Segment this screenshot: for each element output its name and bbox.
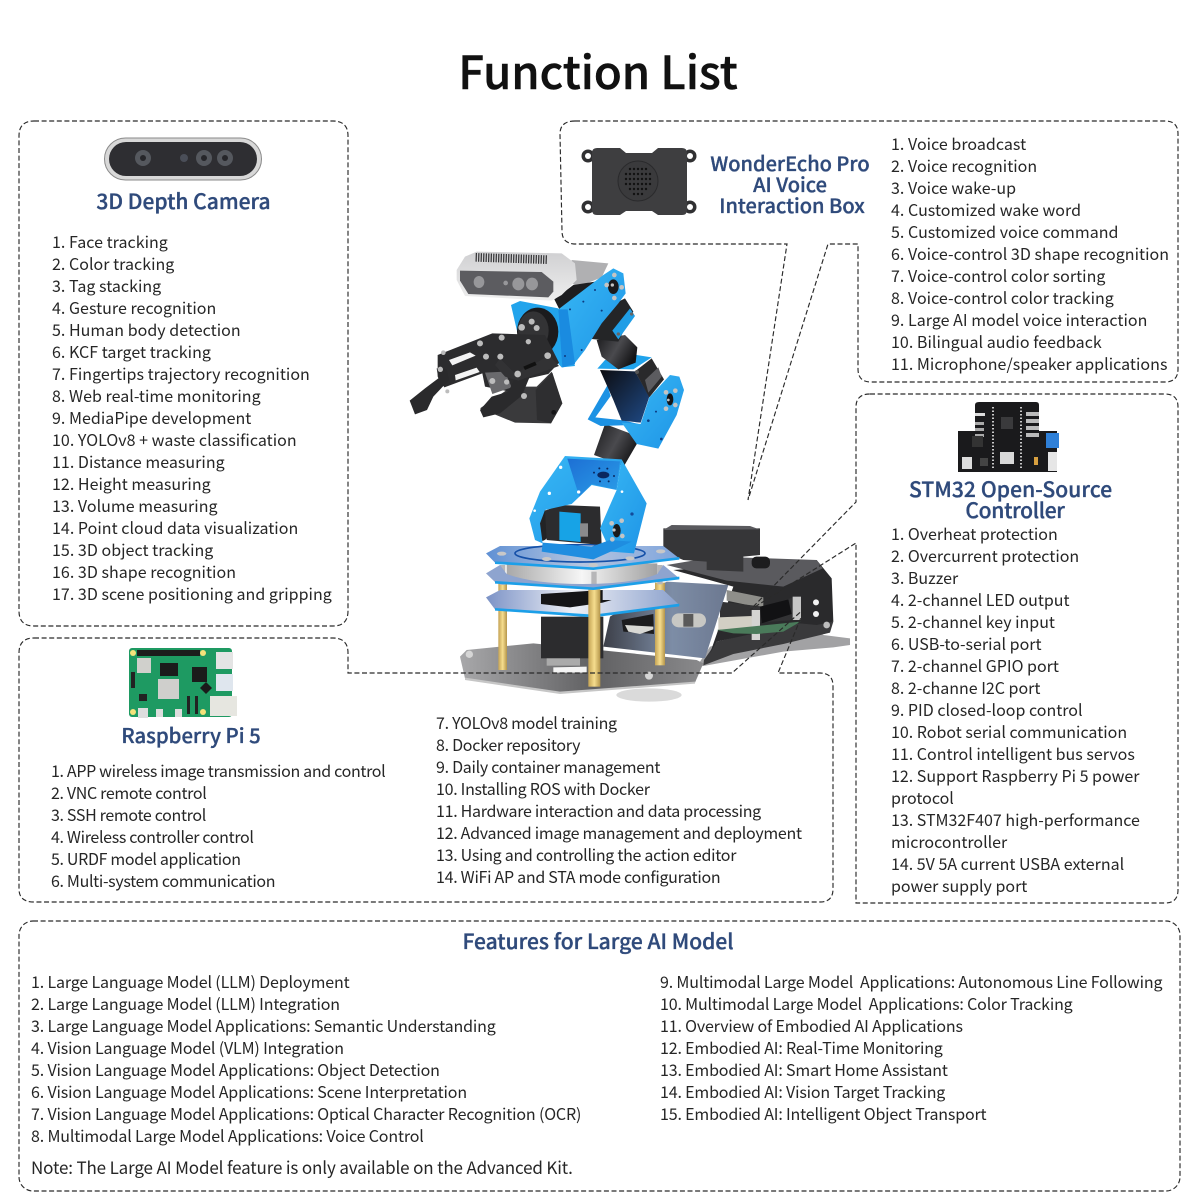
text block: AI features right: 9. Multimodal Large Model Applications: Autonomous Line Following 10. Multimodal Large Model Applications: Color Tracking 11. Overview of Embodied AI Applications 12. Embodied AI: Real-Time Monitoring 13. Embodied AI: Smart Home Assistant 14. Embodied AI: Vision Target Tracking 15. Embodied AI: Intelligent Object Transport — [660, 969, 1162, 1125]
camera on arm — [457, 252, 577, 301]
lower chassis plate — [697, 623, 850, 667]
gold post centre — [588, 589, 600, 687]
icon: depth camera — [104, 138, 262, 180]
text block: Raspberry Pi functions right: 7. YOLOv8 model training 8. Docker repository 9. Daily container management 10. Installing ROS with Docker 11. Hardware interaction and data processing 12. Advanced image management and deployment 13. Using and controlling the action editor 14. WiFi AP and STA mode configuration — [436, 710, 802, 888]
gripper screws — [438, 319, 551, 399]
heading: Raspberry Pi 5: Raspberry Pi 5 — [121, 719, 261, 749]
voice box on chassis — [663, 528, 760, 572]
wrist rotor — [517, 308, 558, 356]
upper servo — [592, 298, 633, 342]
text block: voice functions: 1. Voice broadcast 2. Voice recognition 3. Voice wake-up 4. Customized wake word 5. Customized voice command 6. Voice-control 3D shape recognition 7. Voice-control color sorting 8. Voice-control color tracking 9. Large AI model voice interaction 10. Bilingual audio feedback 11. Microphone/speaker applications — [891, 131, 1169, 375]
panel: Raspberry Pi 5 — [18, 612, 834, 903]
gripper — [410, 319, 562, 423]
title: Function List — [458, 37, 738, 103]
panel: WonderEcho Pro voice box — [559, 120, 1179, 500]
panel: Features for Large AI Model — [18, 920, 1181, 1192]
heading: STM32 Open-Source Controller — [909, 474, 1112, 525]
icon: STM32 board — [958, 402, 1059, 472]
chassis top plate — [667, 557, 823, 587]
gripper left jaw — [410, 368, 449, 414]
heading: WonderEcho Pro AI Voice Interaction Box: AI Voice — [753, 169, 827, 198]
camera mount — [572, 260, 608, 287]
lower U bracket — [529, 456, 622, 543]
text block: controller functions: 1. Overheat protection 2. Overcurrent protection 3. Buzzer 4. 2-channel LED output 5. 2-channel key input 6. USB-to-serial port 7. 2-channel GPIO port 8. 2-channe I2C port 9. PID closed-loop control 10. Robot serial communication 11. Control intelligent bus servos 12. Support Raspberry Pi 5 power protocol 13. STM32F407 high-performance microcontroller 14. 5V 5A current USBA external power supply port — [891, 521, 1140, 897]
middle servo — [600, 370, 649, 423]
upper bracket — [511, 301, 575, 367]
panel: STM32 controller — [750, 393, 1179, 904]
text block: camera functions: 1. Face tracking 2. Color tracking 3. Tag stacking 4. Gesture recognition 5. Human body detection 6. KCF target tracking 7. Fingertips trajectory recognition 8. Web real-time monitoring 9. MediaPipe development 10. YOLOv8 + waste classification 11. Distance measuring 12. Height measuring 13. Volume measuring 14. Point cloud data visualization 15. 3D object tracking 16. 3D shape recognition 17. 3D scene positioning and gripping — [52, 229, 332, 605]
note: Note: The Large AI Model feature is only available on the Advanced Kit. — [31, 1154, 573, 1179]
servo in lower bracket — [532, 509, 551, 541]
black tube lower — [594, 424, 641, 466]
gold post left — [498, 583, 507, 670]
heading: 3D Depth Camera: 3D Depth Camera — [96, 186, 271, 216]
heading: Features for Large AI Model: Features for Large AI Model — [462, 926, 734, 956]
robot arm illustration — [410, 252, 850, 702]
panel: 3D depth camera — [18, 120, 349, 627]
gripper body — [480, 372, 562, 423]
icon: Raspberry Pi board — [129, 648, 237, 718]
raspberry pi in chassis — [727, 590, 763, 608]
base plate — [460, 643, 703, 693]
base servo — [541, 617, 603, 658]
silver turntable — [507, 563, 657, 584]
text block: AI features left: 1. Large Language Model (LLM) Deployment 2. Large Language Model (LLM) Integration 3. Large Language Model Applications: Semantic Understanding 4. Vision Language Model (VLM) Integration 5. Vision Language Model Applications: Object Detection 6. Vision Language Model Applications: Scene Interpretation 7. Vision Language Model Applications: Optical Character Recognition (OCR) 8. Multimodal Large Model Applications: Voice Control — [31, 969, 581, 1147]
middle blue plate — [486, 565, 679, 589]
chassis body — [673, 560, 833, 653]
heading: WonderEcho Pro AI Voice Interaction Box: Interaction Box — [719, 190, 865, 219]
middle bracket frame — [588, 385, 642, 426]
gold post right — [655, 583, 665, 665]
gripper right jaw — [480, 375, 529, 417]
slanted metal plate — [603, 582, 728, 658]
heading: WonderEcho Pro AI Voice Interaction Box — [710, 148, 870, 219]
icon: voice box — [582, 148, 696, 215]
foot disc — [616, 688, 682, 702]
gripper links — [495, 355, 559, 381]
black tube upper — [597, 335, 637, 369]
top blue plate — [486, 546, 679, 569]
lower blue plate — [486, 590, 679, 616]
heading: STM32 Open-Source Controller: Controller — [965, 495, 1065, 525]
heading: WonderEcho Pro AI Voice Interaction Box: WonderEcho Pro — [710, 148, 870, 177]
gripper backing mass — [438, 333, 559, 397]
text block: Raspberry Pi functions left: 1. APP wireless image transmission and control 2. VNC remote control 3. SSH remote control 4. Wireless controller control 5. URDF model application 6. Multi-system communication — [51, 758, 385, 892]
heading: STM32 Open-Source Controller: STM32 Open-Source — [909, 474, 1112, 504]
middle bracket plate — [622, 375, 684, 449]
